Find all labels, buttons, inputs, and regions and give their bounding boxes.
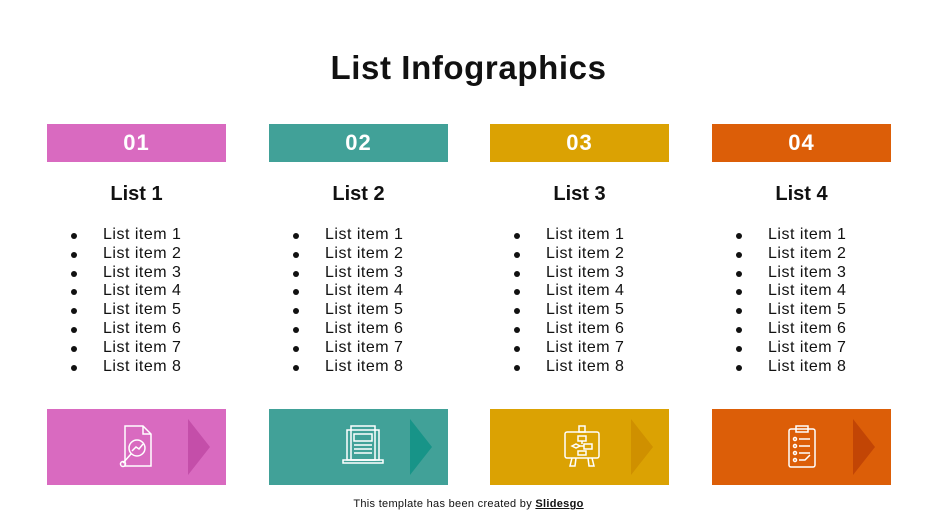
title: List Infographics — [330, 49, 607, 86]
panel: list 1 — [47, 124, 226, 485]
bullet list 1: List item 1 — [103, 226, 181, 243]
bullet list 3: List item 1 — [546, 226, 624, 243]
bullet list 1: List item 6 — [103, 320, 181, 337]
bullet list 1: List item 8 — [103, 358, 181, 375]
header 02 — [269, 124, 448, 162]
bullet list 4: List item 2 — [768, 245, 846, 262]
panel: list 4 — [712, 124, 891, 485]
bullet list 4: List item 5 — [768, 301, 846, 318]
bullet list 2 — [293, 226, 403, 375]
heading List 3: List 3 — [553, 183, 606, 205]
bullet list 2: List item 4 — [325, 282, 403, 299]
bullet list 3: List item 2 — [546, 245, 624, 262]
bullet list 3: List item 8 — [546, 358, 624, 375]
bottom box 4 — [712, 409, 891, 485]
bottom box 1 — [47, 409, 226, 485]
bullet list 1: List item 5 — [103, 301, 181, 318]
arrow 3 — [631, 419, 653, 475]
bullet list 2: List item 7 — [325, 339, 403, 356]
bullet list 3: List item 4 — [546, 282, 624, 299]
bullet list 2: List item 1 — [325, 226, 403, 243]
footer credit: This template has been created by Slidesgo — [353, 498, 584, 510]
arrow 2 — [410, 419, 432, 475]
header 04: 04 — [788, 130, 815, 155]
header 02: 02 — [345, 130, 372, 155]
bullet list 1 — [71, 226, 181, 375]
header 01: 01 — [123, 130, 150, 155]
bullet list 3: List item 3 — [546, 264, 624, 281]
arrow 4 — [853, 419, 875, 475]
heading List 2: List 2 — [332, 183, 385, 205]
bullet list 2: List item 5 — [325, 301, 403, 318]
bullet list 4: List item 8 — [768, 358, 846, 375]
bullet list 4: List item 4 — [768, 282, 846, 299]
icon: clipboard — [788, 425, 816, 468]
bullet list 2: List item 3 — [325, 264, 403, 281]
panel: list 3 — [490, 124, 669, 485]
bullet list 2: List item 8 — [325, 358, 403, 375]
icon: flowchart board — [564, 425, 600, 467]
header 04 — [712, 124, 891, 162]
bullet list 3: List item 5 — [546, 301, 624, 318]
bullet list 3: List item 7 — [546, 339, 624, 356]
bullet list 4: List item 7 — [768, 339, 846, 356]
bullet list 4: List item 6 — [768, 320, 846, 337]
bullet list 4: List item 1 — [768, 226, 846, 243]
bullet list 1: List item 7 — [103, 339, 181, 356]
bullet list 1: List item 3 — [103, 264, 181, 281]
heading List 1: List 1 — [110, 183, 163, 205]
icon: laptop — [342, 425, 384, 464]
heading List 4: List 4 — [775, 183, 828, 205]
header 03: 03 — [566, 130, 593, 155]
bullet list 3: List item 6 — [546, 320, 624, 337]
arrow 1 — [188, 419, 210, 475]
bottom box 3 — [490, 409, 669, 485]
bullet list 3 — [514, 226, 624, 375]
bullet list 4 — [736, 226, 846, 375]
bullet list 1: List item 2 — [103, 245, 181, 262]
bullet list 1: List item 4 — [103, 282, 181, 299]
bullet list 2: List item 6 — [325, 320, 403, 337]
header 01 — [47, 124, 226, 162]
header 03 — [490, 124, 669, 162]
panel: list 2 — [269, 124, 448, 485]
bottom box 2 — [269, 409, 448, 485]
bullet list 4: List item 3 — [768, 264, 846, 281]
bullet list 2: List item 2 — [325, 245, 403, 262]
icon: document search — [120, 425, 152, 468]
